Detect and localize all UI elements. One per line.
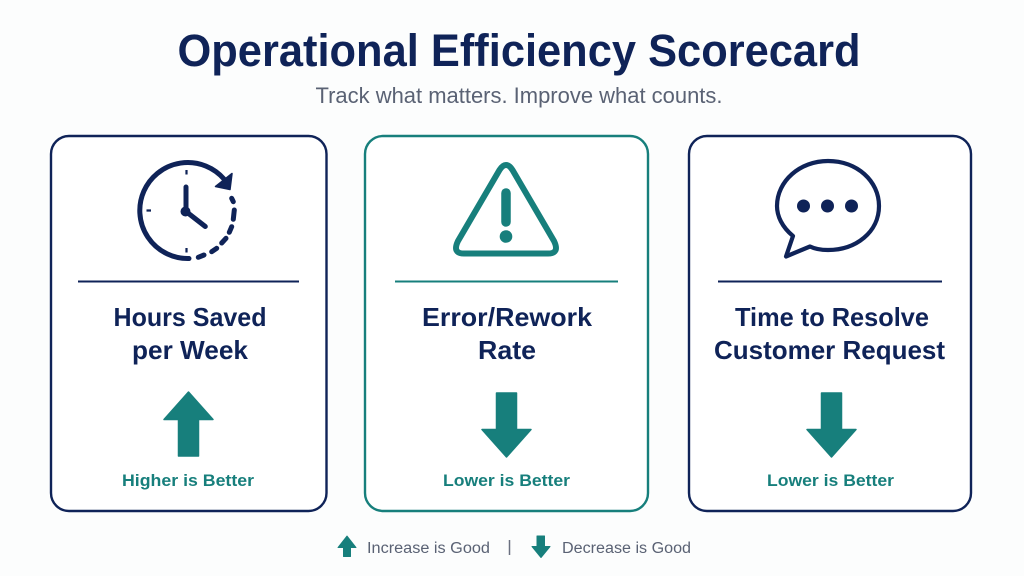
icon: down arrow [807,393,856,457]
heading [114,302,266,365]
divider [78,280,299,282]
divider [395,280,618,282]
panel: hours saved [51,136,326,511]
title: Operational Efficiency Scorecard [178,25,860,76]
icon: legend up arrow [338,536,356,556]
heading: Rate [478,335,536,365]
label: Lower is Better [767,471,894,490]
icon: legend down arrow [532,536,550,558]
heading: per Week [132,335,249,365]
heading: Hours Saved [114,302,266,332]
label: Lower is Better [443,471,570,490]
heading [422,302,593,365]
divider [718,280,942,282]
icon: warning triangle [456,165,556,254]
heading: Time to Resolve [735,302,929,332]
heading: Customer Request [714,335,945,365]
legend: increase: Increase is Good [367,540,490,557]
panel: time to resolve [689,136,971,511]
legend [338,536,691,558]
panel: error rate [365,136,648,511]
icon: down arrow [482,393,531,457]
heading [714,302,945,365]
subtitle: Track what matters. Improve what counts. [316,83,722,108]
icon: speech bubble [777,161,879,256]
heading: Error/Rework [422,302,593,332]
icon: clock [140,163,234,259]
icon: up arrow [164,392,213,456]
legend: decrease: Decrease is Good [562,540,691,557]
label: Higher is Better [122,471,254,490]
